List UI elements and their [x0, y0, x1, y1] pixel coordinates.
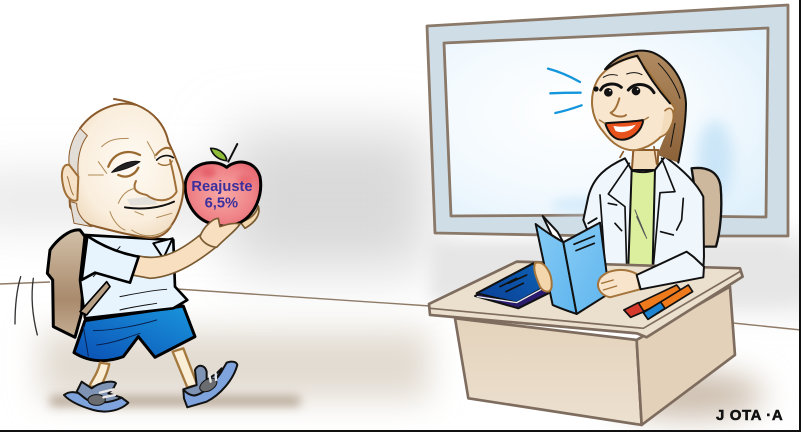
face: [592, 56, 675, 150]
skull and face: [68, 104, 183, 238]
hair: [605, 51, 686, 163]
teacher body: [583, 150, 721, 270]
man feet: [64, 348, 237, 412]
apple label: Reajuste: [191, 179, 253, 195]
left shoe: [64, 382, 128, 412]
shirt folds: [93, 247, 167, 310]
coat lapels and folds: [600, 158, 683, 267]
whiteboard: [427, 5, 788, 236]
speech lines: [548, 69, 582, 113]
man head: [62, 99, 183, 238]
desk side: [637, 287, 735, 425]
teacher head: [592, 51, 686, 164]
back hand behind apple: [240, 206, 259, 228]
front hand: [200, 218, 240, 247]
apple label: 6,5%: [205, 196, 238, 212]
teeth: [613, 125, 636, 132]
shorts: [74, 306, 195, 361]
open book: [536, 216, 609, 314]
shirt: [80, 235, 187, 318]
hair edge: [606, 56, 670, 103]
apple label: [191, 179, 253, 212]
desk top: [429, 262, 743, 337]
markers: [624, 285, 693, 319]
legs: [89, 348, 197, 387]
hair tuft: [114, 99, 135, 104]
mouth: [605, 120, 643, 140]
chair back: [692, 168, 721, 247]
man body: [15, 144, 261, 361]
green shirt: [628, 170, 655, 267]
nose: [135, 160, 177, 200]
wrinkles: [88, 138, 172, 236]
side hair: [69, 128, 87, 177]
closed blue book: [475, 263, 548, 308]
cheek shadow under nose: [127, 196, 157, 206]
eyelashes, eyes and brows: [593, 73, 654, 97]
backpack: [47, 230, 85, 337]
smile: [125, 202, 174, 209]
arm: [132, 235, 217, 278]
neck: [632, 150, 658, 173]
neck shading: [620, 147, 657, 164]
collar: [153, 238, 173, 258]
floor line: [0, 282, 801, 330]
desk: [429, 262, 743, 425]
motion lines: [15, 277, 37, 335]
desk front: [455, 318, 642, 425]
backpack strap: [80, 282, 110, 315]
right shoe: [183, 362, 237, 407]
brows and eyes: [108, 148, 173, 177]
ear: [660, 108, 673, 137]
coat sleeve: [637, 252, 704, 289]
apple: [185, 144, 261, 226]
left hand: [534, 263, 552, 292]
right hand: [598, 270, 640, 297]
nose: [611, 98, 626, 117]
ear: [62, 165, 78, 201]
sleeve: [82, 236, 139, 283]
lab coat: [583, 157, 704, 270]
dimples: [599, 117, 648, 123]
books, hands and markers: [475, 216, 704, 319]
signature: J OTA ·A: [716, 407, 783, 424]
